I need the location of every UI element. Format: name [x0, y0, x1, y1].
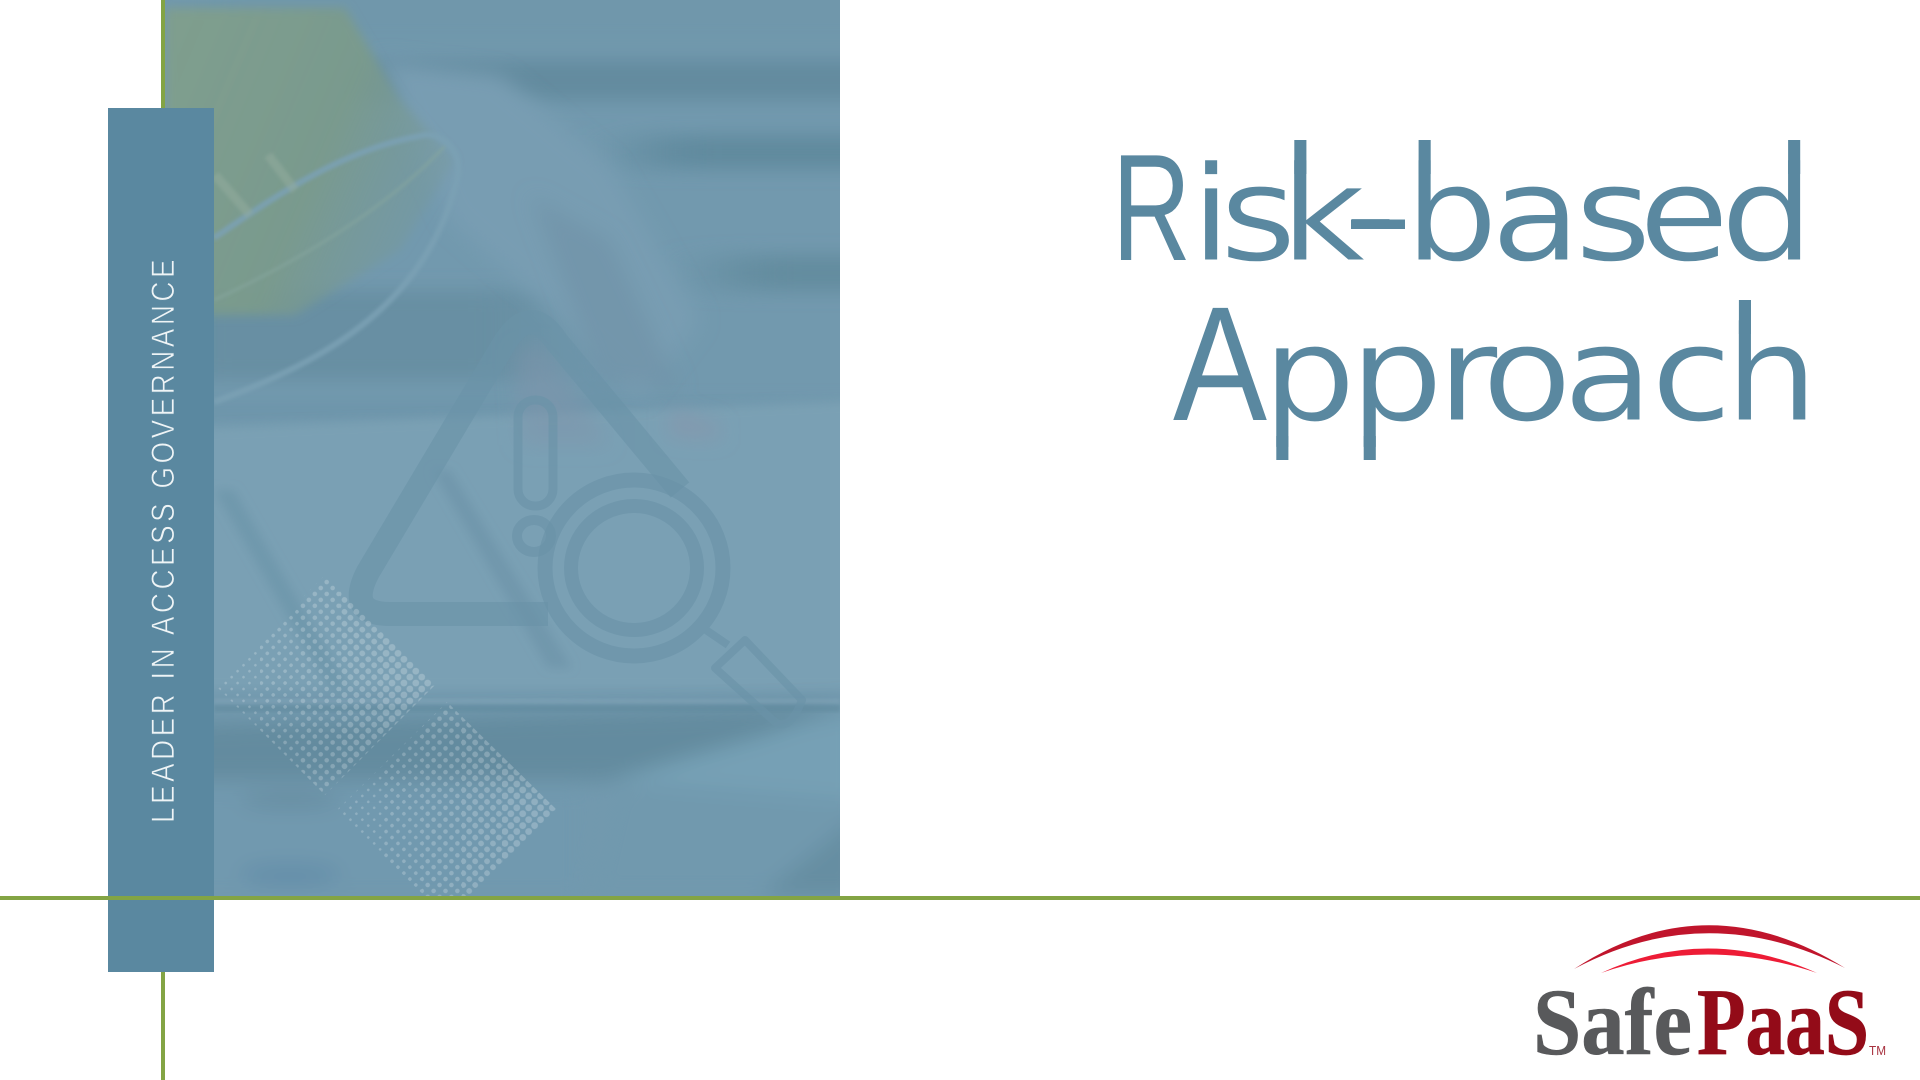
photo: reddish pen tip: [524, 357, 548, 382]
logo trademark: TM: [1869, 1043, 1886, 1058]
logo arc outer: [1574, 925, 1845, 969]
logo wordmark: PaaS: [1697, 969, 1869, 1075]
panel: blurred photo with blue overlay: [165, 0, 840, 896]
horizontal green line: [0, 896, 1920, 900]
photo: lines across the desk: [224, 494, 558, 685]
title: [1112, 123, 1818, 460]
photo: green tinted glasses lens: [165, 8, 455, 315]
title: A: [1173, 273, 1267, 455]
vertical label bar: [108, 108, 214, 972]
vertical tagline: LEADER IN ACCESS GOVERNANCE: [145, 256, 181, 823]
photo: keyboard and laptop edge: [214, 712, 840, 891]
halftone diamond left: [218, 578, 434, 795]
title: isk-based: [1191, 138, 1814, 292]
halftone diamond right: [338, 702, 556, 896]
icon: warning triangle with exclamation mark: [349, 396, 689, 626]
logo wordmark: Safe: [1533, 969, 1692, 1075]
photo: dark background bands: [214, 62, 840, 376]
logo: SafePaaS: [1533, 925, 1886, 1075]
title: pproach: [1262, 298, 1818, 452]
photo: pale hand: [388, 64, 652, 310]
icon: magnifying glass: [545, 480, 802, 724]
photo: bright lower page area: [214, 404, 840, 680]
vertical green line: [161, 0, 165, 1080]
title: R: [1112, 123, 1191, 293]
photo: glasses rim: [214, 135, 458, 402]
logo arc inner: [1601, 948, 1817, 973]
